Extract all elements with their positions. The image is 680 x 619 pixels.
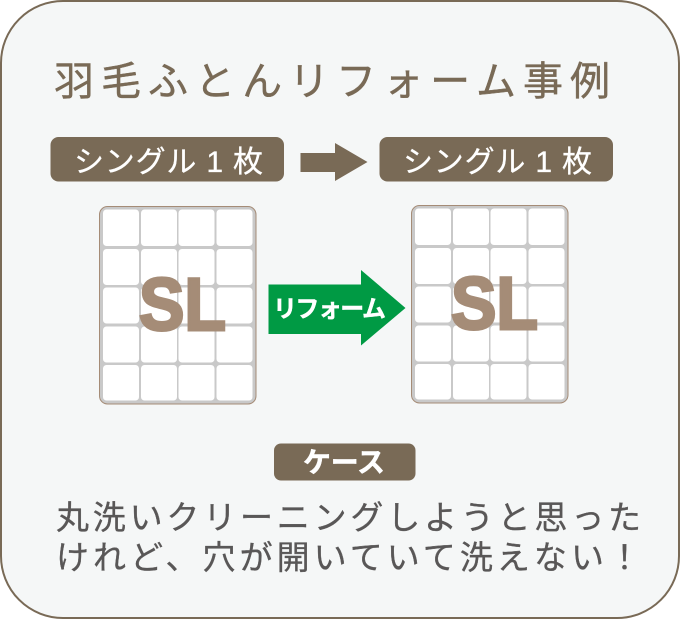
mattress: before [100,206,256,404]
text block: case description [56,499,641,576]
label: after [380,137,613,182]
text block: case description: 丸洗いクリーニングしようと思った [56,499,641,536]
mattress: after: SL [451,262,538,345]
label: after: シングル 1 枚 [403,146,592,179]
label: before: シングル 1 枚 [74,146,263,179]
mattress: before: SL [139,263,226,346]
arrow: reform [268,270,406,346]
label: case [274,444,416,480]
mattress: after [412,206,568,403]
text block: case description: けれど、穴が開いていて洗えない！ [56,539,641,576]
label: case: ケース [303,447,385,478]
title: 羽毛ふとんリフォーム事例 [54,60,610,104]
arrow: brown [300,143,368,181]
arrow: reform: リフォーム [273,296,386,323]
label: before [50,137,284,182]
